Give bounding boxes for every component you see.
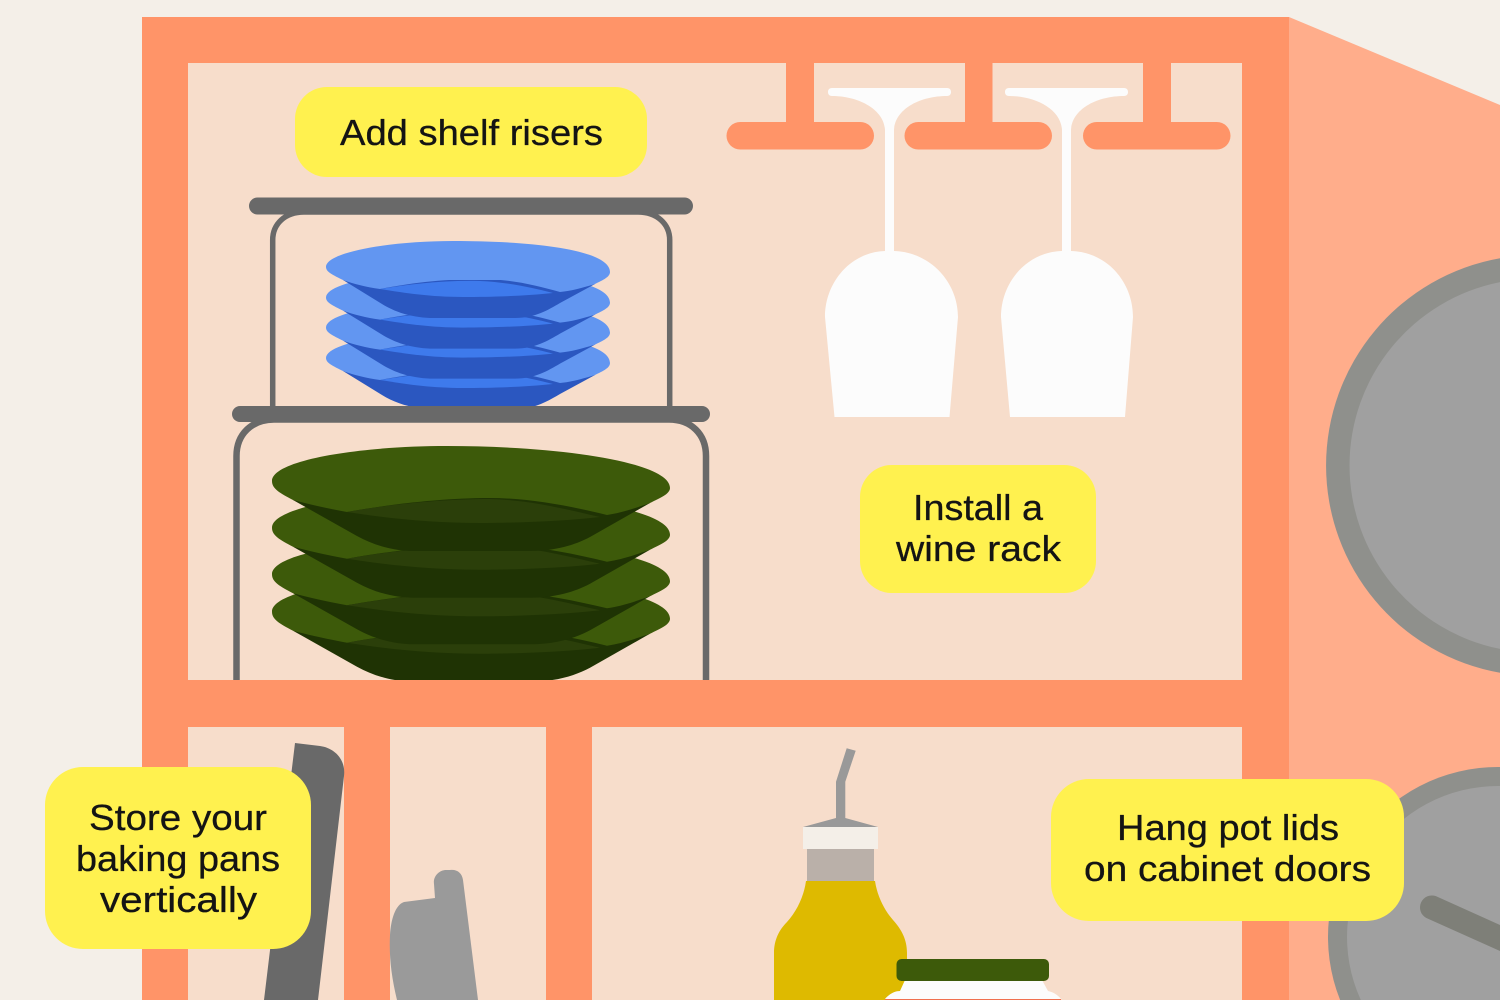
callout: store baking pans vertically: Store your bbox=[89, 797, 267, 838]
callout: store baking pans vertically bbox=[45, 767, 311, 949]
rack bracket 1 bbox=[726, 63, 874, 150]
wine glass right bbox=[1001, 88, 1133, 417]
callout: store baking pans vertically: baking pans bbox=[76, 838, 280, 879]
oil bottle bbox=[774, 748, 907, 1000]
grey baking pan bbox=[390, 870, 478, 1000]
bottle spout bbox=[803, 748, 878, 827]
callout: hang pot lids: on cabinet doors bbox=[1084, 848, 1371, 889]
callout: install a wine rack bbox=[860, 465, 1096, 593]
lower middle compartment bbox=[390, 727, 546, 1000]
cabinet frame bbox=[142, 17, 1289, 1000]
lower left compartment bbox=[188, 727, 344, 1000]
callout: hang pot lids bbox=[1051, 779, 1404, 921]
lid handle bbox=[1420, 895, 1500, 951]
rack bracket 3 bbox=[1083, 63, 1230, 150]
callout: add shelf risers bbox=[295, 87, 647, 177]
open cabinet door bbox=[1289, 17, 1500, 1000]
upper pot lid bbox=[1326, 258, 1500, 673]
rack bracket 2 bbox=[904, 63, 1052, 150]
jar bbox=[885, 959, 1061, 1000]
upper shelf riser bbox=[249, 198, 693, 408]
callout: add shelf risers: Add shelf risers bbox=[340, 112, 603, 153]
callout: hang pot lids: Hang pot lids bbox=[1117, 807, 1339, 848]
blue plate stack bbox=[326, 241, 610, 409]
wine glass left bbox=[825, 88, 958, 417]
jar label edge bbox=[885, 999, 1061, 1000]
callout: install a wine rack: Install a bbox=[913, 487, 1044, 528]
lower shelf riser bbox=[232, 406, 710, 680]
wine rack bbox=[726, 63, 1230, 150]
bottle neck bbox=[807, 849, 874, 882]
dark baking pan bbox=[264, 743, 344, 1000]
upper shelf compartment bbox=[188, 63, 1242, 680]
green plate stack bbox=[272, 446, 670, 682]
jar lid bbox=[896, 959, 1049, 981]
bottle collar bbox=[803, 827, 878, 849]
bottle oil bbox=[774, 881, 907, 1000]
lower pot lid bbox=[1328, 767, 1500, 1000]
lower right compartment bbox=[592, 727, 1242, 1000]
callout: store baking pans vertically: vertically bbox=[100, 879, 257, 920]
callout: install a wine rack: wine rack bbox=[895, 528, 1062, 569]
jar body bbox=[885, 980, 1061, 1000]
